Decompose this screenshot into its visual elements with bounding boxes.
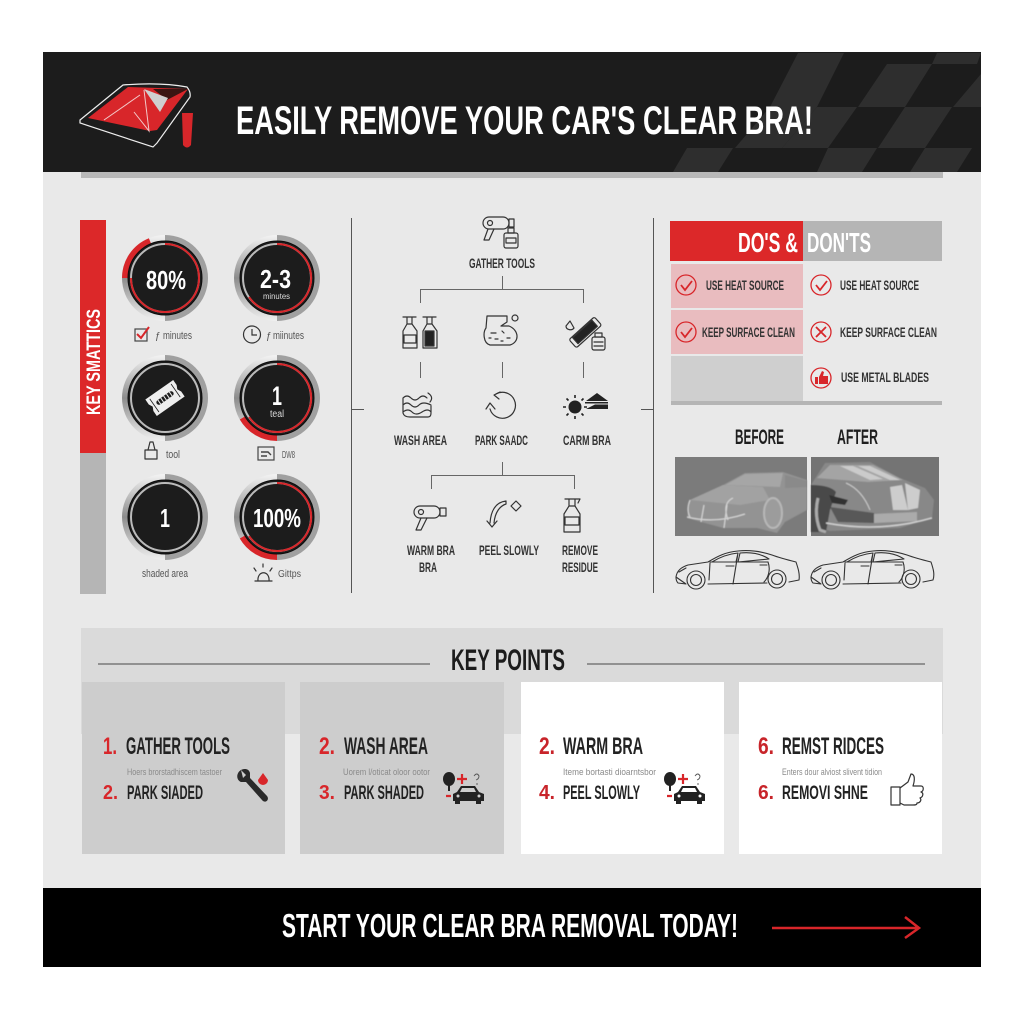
card 3: PEEL SLOWLY xyxy=(563,783,640,804)
icon: clock xyxy=(244,326,260,343)
card 2: 3. xyxy=(319,782,335,804)
card 1: PARK SIADED xyxy=(127,783,203,804)
don't: use heat source xyxy=(811,275,919,295)
step: carm bra: CARM BRA xyxy=(563,432,611,448)
gauge: 1 teal: DW8 xyxy=(282,449,295,461)
icon: heat gun and bottle xyxy=(483,217,518,248)
icon: peel arrow and drop xyxy=(487,501,521,527)
panel: process flow xyxy=(394,217,611,575)
gauge: 100% xyxy=(234,474,320,581)
icon: red car cover with spray bottle xyxy=(80,84,193,148)
step: gather tools xyxy=(469,217,535,271)
gauge: 80%: minutes xyxy=(163,330,192,342)
icon: screen xyxy=(258,447,274,460)
before heading: BEFORE xyxy=(735,426,784,449)
key statistics side bar xyxy=(80,220,106,594)
step: warm bra: BRA xyxy=(419,559,437,575)
do: keep surface clean xyxy=(676,322,795,342)
card 3: Iteme bortasti dioarntsbor xyxy=(563,767,656,778)
step: peel slowly: PEEL SLOWLY xyxy=(479,542,539,558)
card 4: 6. xyxy=(758,782,774,804)
card 3: 4. xyxy=(539,782,555,804)
before photo xyxy=(675,457,807,536)
gauge: 1 shaded area xyxy=(122,474,208,580)
do: use heat source xyxy=(676,275,784,295)
key points heading: KEY POINTS xyxy=(451,644,565,677)
card 1: 1. xyxy=(103,733,117,760)
don't: keep surface clean xyxy=(811,322,937,342)
header banner xyxy=(43,52,981,178)
car outline: before xyxy=(676,551,799,589)
panel: key statistics xyxy=(80,220,320,594)
step: remove residue: RESIDUE xyxy=(562,559,598,575)
gauge: razor blade xyxy=(122,355,208,461)
don't: use heat source: USE HEAT SOURCE xyxy=(840,277,919,293)
call to action footer xyxy=(43,888,981,967)
step: warm bra xyxy=(407,506,455,575)
icon: wrench and drop xyxy=(237,769,268,802)
card 2 xyxy=(300,682,504,854)
don't: keep surface clean: KEEP SURFACE CLEAN xyxy=(840,324,937,340)
gauge: 80% xyxy=(122,235,208,342)
after heading: AFTER xyxy=(837,426,878,449)
icon: checkbox xyxy=(135,327,149,341)
card 4: REMST RIDCES xyxy=(782,733,884,760)
card 4: REMOVI SHNE xyxy=(782,783,868,804)
after photo xyxy=(811,457,939,536)
icon: sun and shade xyxy=(563,393,608,419)
don't: use metal blades xyxy=(811,368,929,388)
connector lines xyxy=(420,276,584,489)
do's and don'ts header: DON'TS xyxy=(807,227,871,258)
gauge: 2-3 minutes: minutes xyxy=(263,291,290,301)
card 1 xyxy=(82,682,285,854)
step: wash area xyxy=(394,393,447,448)
step: park shade xyxy=(475,392,528,448)
icon: foam waves xyxy=(403,393,432,417)
step: remove residue xyxy=(562,499,598,575)
do: use heat source: USE HEAT SOURCE xyxy=(706,277,784,293)
icon: spray bottle xyxy=(564,499,580,532)
icon: squeegee and bottle xyxy=(566,317,605,350)
icon: circular arrow xyxy=(486,392,515,418)
icon: car under tree xyxy=(664,772,705,804)
card 4 xyxy=(739,682,942,854)
gauge: razor blade: tool xyxy=(166,449,180,461)
card 1: Hoers brorstadhiscem tastoer xyxy=(127,767,222,778)
gauge: 1 teal: 1 xyxy=(272,381,282,411)
gauge: 100%: Gittps xyxy=(278,568,301,580)
gauge: 2-3 minutes: miinutes xyxy=(273,330,304,342)
step: park shade: PARK SAADC xyxy=(475,432,528,448)
gauge: 2-3 minutes: 2-3 xyxy=(260,264,291,294)
step: warm bra: WARM BRA xyxy=(407,542,455,558)
gauge: 1 shaded area: 1 xyxy=(160,503,170,533)
icon: tool xyxy=(145,442,157,459)
card 3: WARM BRA xyxy=(563,733,643,760)
card 2: Uorem l/oticat oloor ootor xyxy=(343,767,430,778)
icon: car under tree xyxy=(443,772,484,804)
panel dividers xyxy=(351,218,654,593)
card 2: WASH AREA xyxy=(344,733,428,760)
panel: before and after xyxy=(675,426,939,589)
gauge: 2-3 minutes: ƒ xyxy=(266,331,272,342)
gauge: 80%: 80% xyxy=(146,265,186,295)
card 1: 2. xyxy=(103,782,118,804)
card 4: 6. xyxy=(758,733,774,760)
card 3: 2. xyxy=(539,733,555,760)
card 2: 2. xyxy=(319,733,335,760)
card 2: PARK SHADED xyxy=(344,783,424,804)
gauge: 100%: 100% xyxy=(253,503,301,533)
step: gather tools: GATHER TOOLS xyxy=(469,255,535,271)
icon: thumbs up xyxy=(891,774,923,805)
do's and don'ts header xyxy=(670,221,942,261)
gauge: 80%: ƒ xyxy=(155,331,161,342)
step: peel slowly xyxy=(479,501,539,558)
gauge: 1 shaded area: shaded area xyxy=(142,568,189,580)
card 3 xyxy=(521,682,724,854)
do: keep surface clean: KEEP SURFACE CLEAN xyxy=(702,324,795,340)
gauge: 2-3 minutes xyxy=(234,235,320,343)
gauge: 1 teal xyxy=(234,355,320,461)
key points band xyxy=(81,628,943,734)
panel: key points xyxy=(81,628,943,854)
icon: razor blade xyxy=(145,380,185,416)
car outline: after xyxy=(811,551,934,589)
call to action footer: START YOUR CLEAR BRA REMOVAL TODAY! xyxy=(282,907,738,944)
step: wash area: WASH AREA xyxy=(394,432,447,448)
icon: heat gun xyxy=(414,506,446,530)
icon: burst xyxy=(254,564,272,581)
key statistics side bar: KEY SMATTICS xyxy=(84,309,105,415)
icon: spray bottles xyxy=(403,317,437,348)
gauge: 1 teal: teal xyxy=(270,409,284,420)
arrow xyxy=(772,917,919,938)
card 4: Enters dour alviost slivent tidion xyxy=(782,767,882,778)
step: carm bra xyxy=(563,393,611,448)
do's and don'ts header: DO'S & xyxy=(738,227,798,258)
panel: do's and don'ts xyxy=(670,221,942,405)
don't: use metal blades: USE METAL BLADES xyxy=(841,369,929,385)
step: remove residue: REMOVE xyxy=(562,542,598,558)
card 1: GATHER TOOLS xyxy=(126,733,230,760)
icon: sponge xyxy=(484,315,518,345)
